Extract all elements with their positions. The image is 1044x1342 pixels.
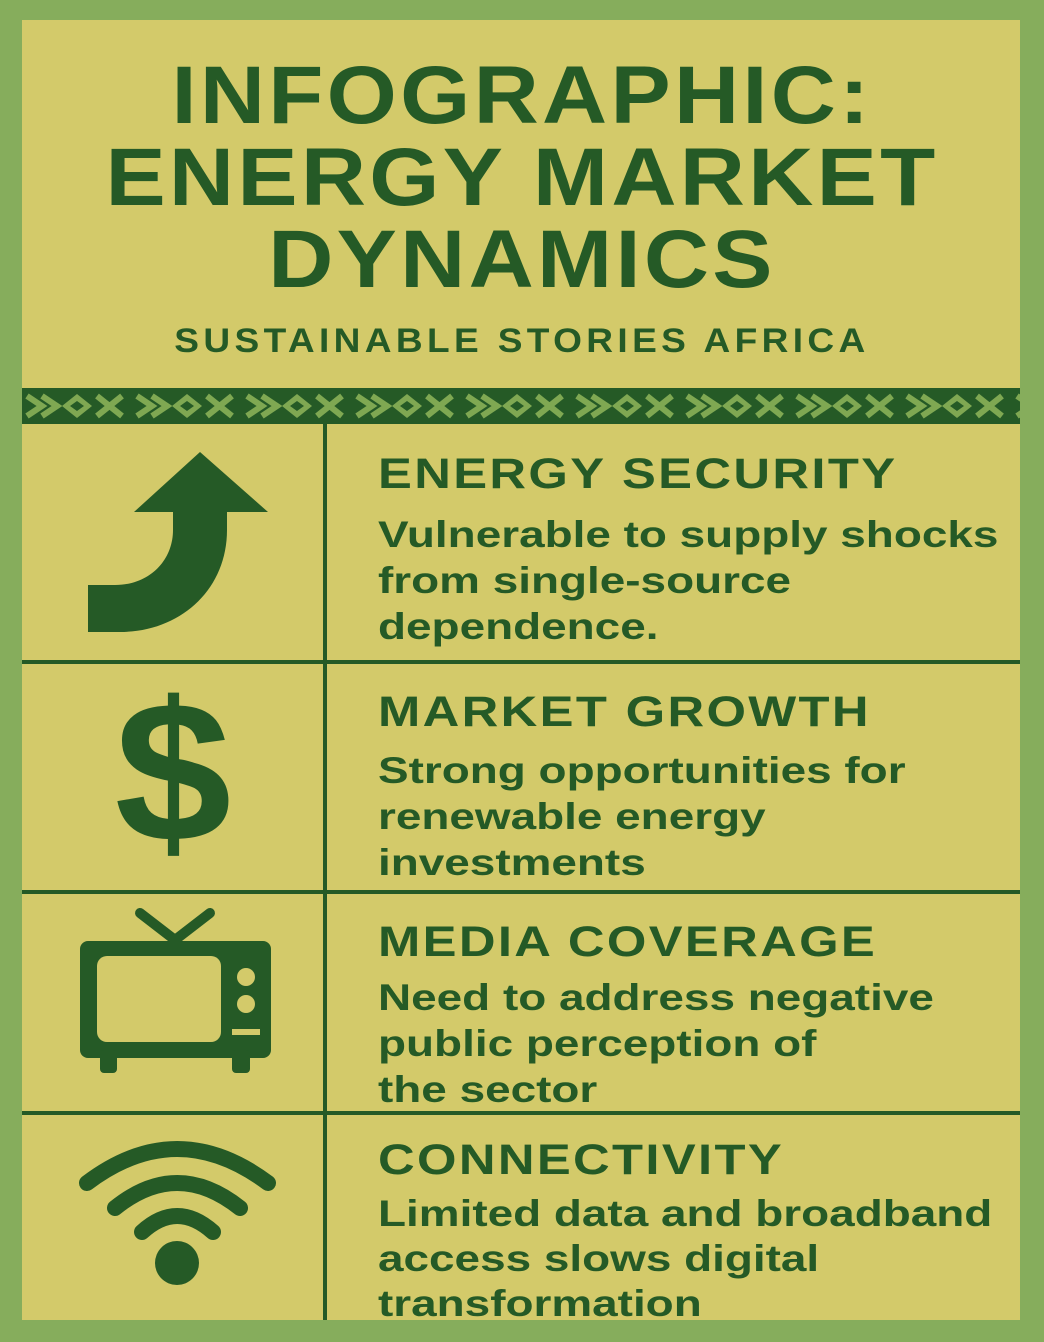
bottom border <box>0 1320 1044 1342</box>
title: DYNAMICS <box>268 214 776 305</box>
title: INFOGRAPHIC: <box>171 50 873 141</box>
text: public perception of <box>378 1023 816 1064</box>
text: Vulnerable to supply shocks <box>378 514 998 555</box>
icon: dollar: $ <box>115 661 231 884</box>
subtitle: SUSTAINABLE STORIES AFRICA <box>174 322 870 360</box>
section: connectivity: CONNECTIVITY <box>378 1136 784 1184</box>
title: ENERGY MARKET <box>105 132 939 223</box>
text: access slows digital <box>378 1238 819 1279</box>
section: media coverage: MEDIA COVERAGE <box>378 918 877 966</box>
text: renewable energy <box>378 796 766 837</box>
text: transformation <box>378 1283 702 1324</box>
icon: arrow <box>88 452 268 632</box>
decorative band <box>22 388 1020 424</box>
text: investments <box>378 842 646 883</box>
text: the sector <box>378 1069 597 1110</box>
section: market growth: MARKET GROWTH <box>378 688 871 736</box>
section: energy security: ENERGY SECURITY <box>378 450 897 498</box>
icon: tv <box>80 908 271 1073</box>
icon: wifi <box>79 1141 276 1285</box>
title <box>105 50 939 305</box>
text: from single-source <box>378 560 791 601</box>
text: Strong opportunities for <box>378 750 906 791</box>
text: dependence. <box>378 606 658 647</box>
text: Limited data and broadband <box>378 1193 992 1234</box>
text: Need to address negative <box>378 977 934 1018</box>
grid lines <box>323 423 327 1323</box>
